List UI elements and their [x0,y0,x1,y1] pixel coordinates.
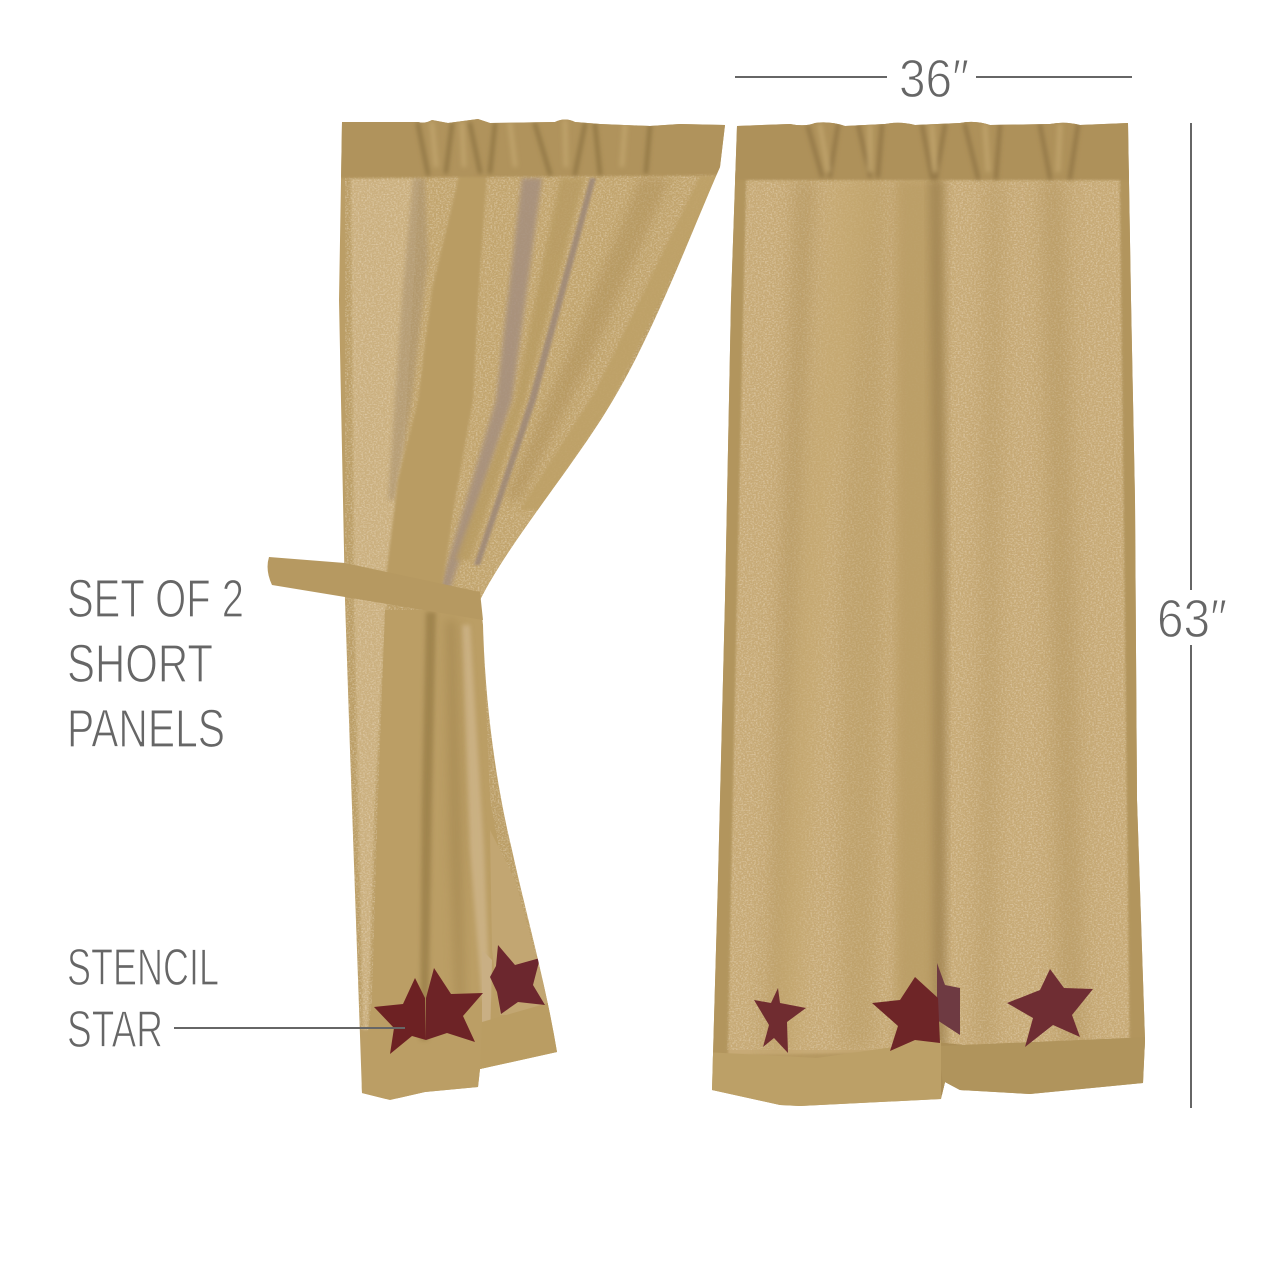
panel: right curtain [700,118,1160,1110]
bottom hems [944,1038,1145,1094]
dimension: height 63 inches: 63″ [1157,589,1227,649]
sheer fabric body [728,178,1130,1055]
top band [730,118,1135,180]
vertical folds [768,178,1085,1050]
stars, right curtain [754,963,1093,1053]
label: set of 2 short panels: SET OF 2 [67,569,244,629]
label: set of 2 short panels: PANELS [67,699,225,759]
folds of left curtain [388,176,720,595]
lower gathered drape [362,610,506,1099]
sheer back panel [351,178,420,1030]
dimension: width 36 inches: 36″ [899,49,969,109]
lower hem [480,1003,557,1069]
callout: stencil star [67,939,405,1059]
stars, left curtain [374,945,545,1054]
label: set of 2 short panels [67,569,244,759]
front hem fold [383,172,487,600]
label: set of 2 short panels: SHORT [67,634,213,694]
back hem [941,1042,965,1095]
callout: stencil star: STENCIL [67,939,219,997]
hem strips [710,170,746,1060]
top band [335,116,730,178]
callout: stencil star: STAR [67,1001,163,1059]
panel: left curtain [268,116,730,1100]
tieback [268,557,483,620]
gathers [808,124,1078,178]
